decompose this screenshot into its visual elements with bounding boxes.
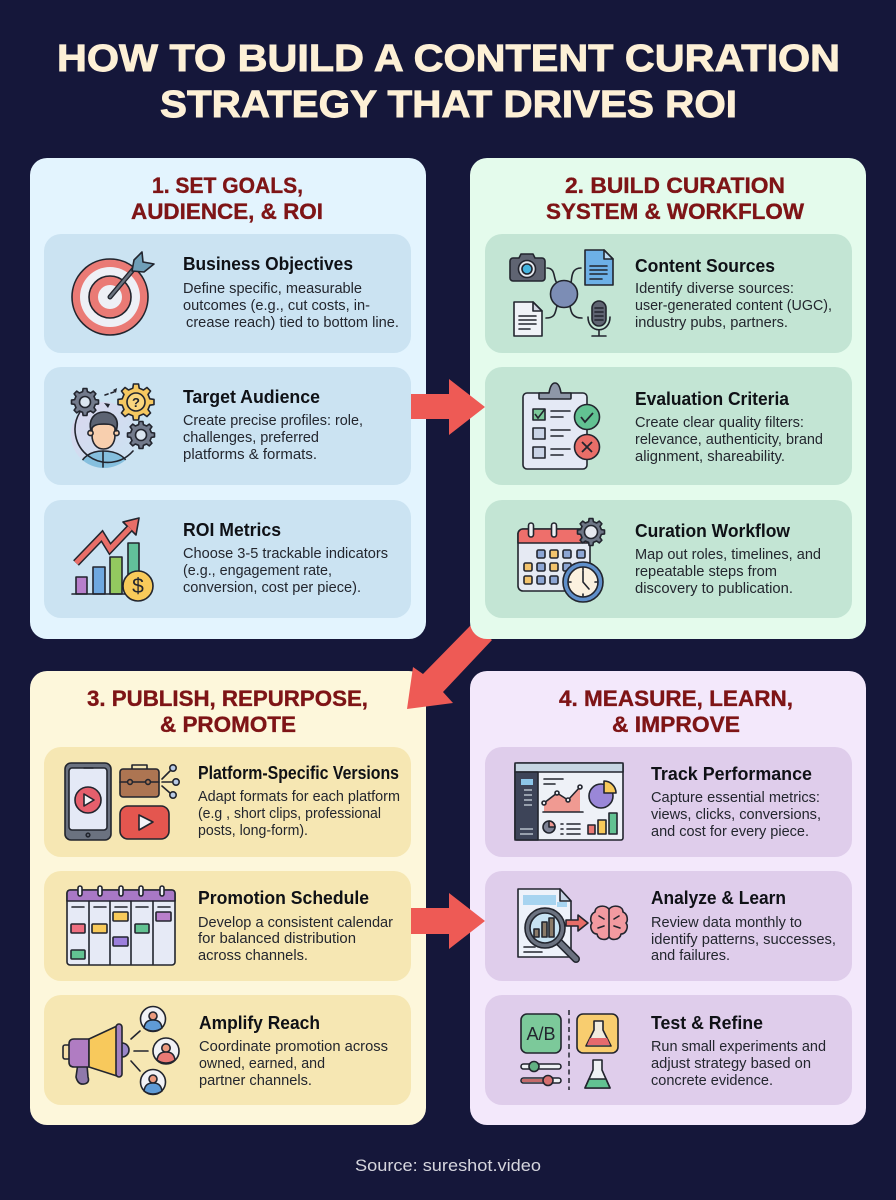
card: business objectives: [44, 234, 411, 353]
heading: panel 4: & IMPROVE: [612, 712, 740, 737]
text: content sources: Content Sources: [635, 256, 775, 276]
text: target audience: platforms & formats.: [183, 447, 317, 463]
icon: person with gears: ?: [132, 395, 140, 410]
text: test and refine: concrete evidence.: [651, 1073, 773, 1089]
heading: panel 3: [87, 686, 368, 737]
text: platform-specific versions: Platform-Specific Versions: [198, 763, 399, 783]
text: roi metrics: ROI Metrics: [183, 520, 281, 540]
text: promotion schedule: Promotion Schedule: [198, 888, 369, 908]
card: promotion schedule: [44, 871, 411, 981]
text: promotion schedule: [198, 888, 393, 964]
card: content sources: [485, 234, 852, 353]
text: roi metrics: [183, 520, 388, 596]
text: analyze and learn: Review data monthly to: [651, 915, 802, 931]
text: analyze and learn: and failures.: [651, 948, 730, 964]
text: evaluation criteria: Create clear quality filters:: [635, 415, 804, 431]
text: curation workflow: repeatable steps from: [635, 564, 777, 580]
heading: panel 2: 2. BUILD CURATION: [565, 173, 785, 198]
text: test and refine: adjust strategy based on: [651, 1056, 811, 1072]
text: track performance: [651, 764, 821, 840]
card: platform-specific versions: [44, 747, 411, 857]
text: business objectives: [183, 254, 399, 331]
text: content sources: user-generated content (UGC),: [635, 298, 832, 314]
text: curation workflow: Map out roles, timelines, and: [635, 547, 821, 563]
icon: phone, briefcase and video: [65, 763, 179, 840]
icon: person with gears: [71, 384, 154, 472]
text: business objectives: crease reach) tied to bottom line.: [186, 315, 399, 331]
text: test and refine: [651, 1013, 826, 1089]
heading: panel 4: 4. MEASURE, LEARN,: [559, 686, 793, 711]
icon: rising bar chart with coin: $: [132, 575, 144, 598]
text: evaluation criteria: alignment, shareability.: [635, 449, 785, 465]
heading: panel 4: [559, 686, 793, 737]
icon: a/b test and flasks: [521, 1010, 618, 1090]
text: roi metrics: conversion, cost per piece).: [183, 580, 361, 596]
text: track performance: and cost for every piece.: [651, 824, 809, 840]
heading: panel 1: 1. SET GOALS,: [152, 173, 303, 198]
text: amplify reach: owned, earned, and: [199, 1056, 325, 1072]
arrow: step 2 to step 3: [407, 625, 492, 709]
icon: a/b test and flasks: A/B: [526, 1024, 556, 1044]
text: amplify reach: partner channels.: [199, 1073, 312, 1089]
text: platform-specific versions: [198, 763, 400, 839]
icon: clipboard checklist: [523, 383, 600, 469]
text: test and refine: Run small experiments and: [651, 1039, 826, 1055]
icon: weekly calendar: [67, 886, 175, 965]
panel: 3 publish: [30, 671, 426, 1125]
card: track performance: [485, 747, 852, 857]
text: curation workflow: [635, 521, 821, 597]
icon: analytics dashboard: [515, 763, 623, 840]
title: HOW TO BUILD A CONTENT CURATION: [57, 38, 840, 80]
text: amplify reach: [199, 1013, 388, 1089]
card: roi metrics: [44, 500, 411, 618]
text: track performance: views, clicks, conversions,: [651, 807, 821, 823]
text: curation workflow: Curation Workflow: [635, 521, 791, 541]
text: business objectives: Business Objectives: [183, 254, 353, 274]
text: track performance: Track Performance: [651, 764, 812, 784]
arrow: step 1 to step 2: [411, 379, 485, 435]
heading: panel 2: [546, 173, 804, 224]
heading: panel 1: AUDIENCE, & ROI: [131, 199, 323, 224]
heading: panel 2: SYSTEM & WORKFLOW: [546, 199, 804, 224]
text: platform-specific versions: Adapt formats for each platform: [198, 789, 400, 805]
panel: 4 measure: [470, 671, 866, 1125]
card: analyze and learn: [485, 871, 852, 981]
arrow: step 3 to step 4: [411, 893, 485, 949]
text: evaluation criteria: relevance, authenticity, brand: [635, 432, 823, 448]
heading: panel 1: [131, 173, 323, 224]
text: promotion schedule: across channels.: [198, 948, 308, 964]
text: amplify reach: Amplify Reach: [199, 1013, 320, 1033]
card: test and refine: [485, 995, 852, 1105]
heading: panel 3: 3. PUBLISH, REPURPOSE,: [87, 686, 368, 711]
text: test and refine: Test & Refine: [651, 1013, 763, 1033]
text: analyze and learn: Analyze & Learn: [651, 888, 786, 908]
text: track performance: Capture essential metrics:: [651, 790, 820, 806]
text: platform-specific versions: (e.g , short clips, professional: [198, 806, 381, 822]
text: roi metrics: (e.g., engagement rate,: [183, 563, 332, 579]
icon: calendar, gear and clock: [518, 518, 604, 602]
text: target audience: [183, 387, 363, 463]
panel: 2 build system: [470, 158, 866, 639]
text: target audience: challenges, preferred: [183, 430, 319, 446]
card: curation workflow: [485, 500, 852, 618]
text: content sources: [635, 256, 832, 331]
text: business objectives: outcomes (e.g., cut costs, in-: [183, 298, 370, 314]
text: evaluation criteria: Evaluation Criteria: [635, 389, 790, 409]
text: promotion schedule: Develop a consistent calendar: [198, 915, 393, 931]
text: content sources: Identify diverse sources:: [635, 281, 794, 297]
text: amplify reach: Coordinate promotion across: [199, 1039, 388, 1055]
icon: report, magnifier and brain: [518, 889, 627, 959]
text: analyze and learn: identify patterns, successes,: [651, 932, 836, 948]
icon: source network: [510, 250, 613, 336]
icon: megaphone to audience: [63, 1006, 179, 1094]
text: content sources: industry pubs, partners.: [635, 315, 788, 331]
icon: rising bar chart with coin: [72, 518, 153, 601]
card: target audience: [44, 367, 411, 485]
text: roi metrics: Choose 3-5 trackable indicators: [183, 546, 388, 562]
title: [57, 38, 840, 126]
icon: target with dart: [72, 252, 154, 335]
panel: 1 set goals: [30, 158, 426, 639]
title: STRATEGY THAT DRIVES ROI: [160, 84, 737, 126]
source credit: Source: sureshot.video: [355, 1156, 541, 1175]
card: evaluation criteria: [485, 367, 852, 485]
text: platform-specific versions: posts, long-form).: [198, 823, 308, 839]
text: target audience: Create precise profiles: role,: [183, 413, 363, 429]
text: promotion schedule: for balanced distribution: [198, 931, 356, 947]
text: target audience: Target Audience: [183, 387, 320, 407]
card: amplify reach: [44, 995, 411, 1105]
text: evaluation criteria: [635, 389, 823, 465]
text: business objectives: Define specific, measurable: [183, 281, 362, 297]
heading: panel 3: & PROMOTE: [160, 712, 296, 737]
text: curation workflow: discovery to publication.: [635, 581, 793, 597]
text: analyze and learn: [651, 888, 836, 964]
